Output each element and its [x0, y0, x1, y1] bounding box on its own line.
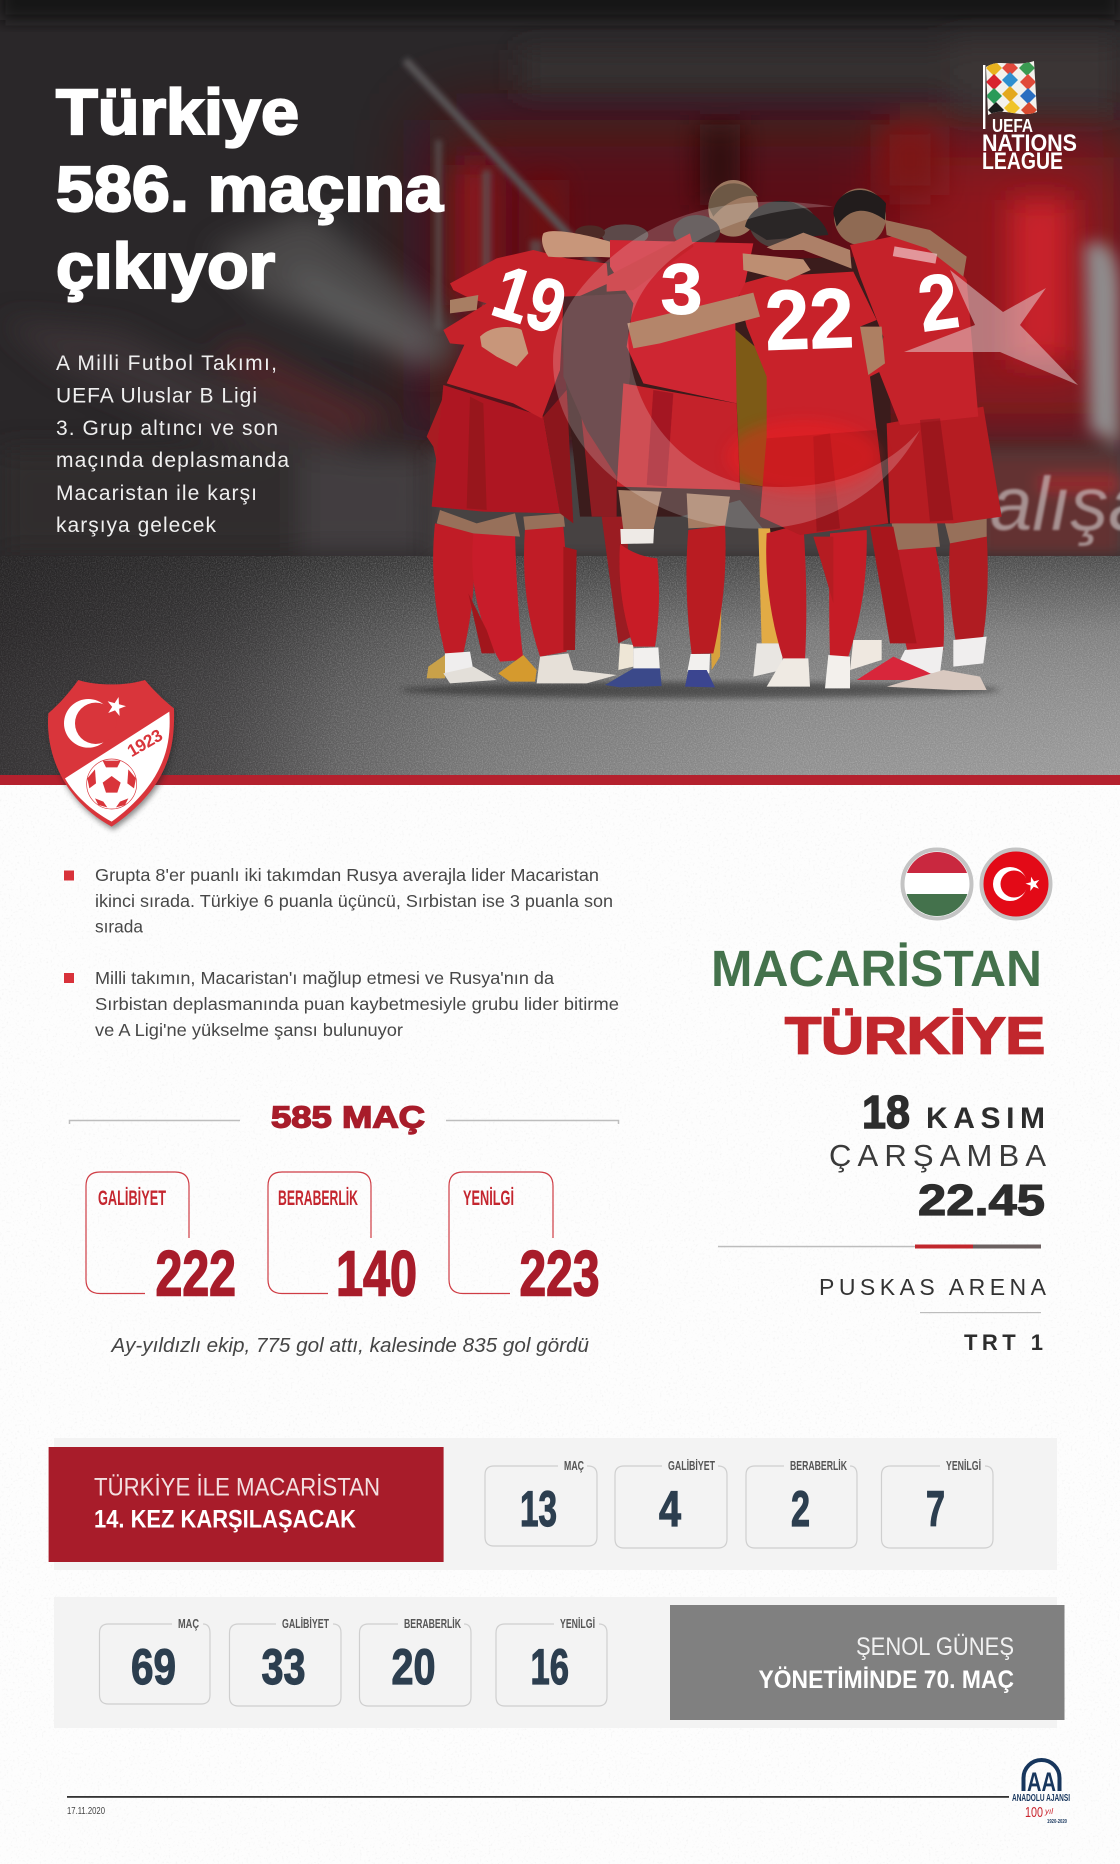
bullet two: ve A Ligi'ne yükselme şansı bulunuyor: [95, 1020, 403, 1040]
stat box: beraberlik 2: BERABERLİK: [790, 1458, 847, 1473]
logo: UEFA Nations League: UEFA: [992, 115, 1033, 136]
stat box: beraberlik 20: BERABERLİK: [404, 1616, 461, 1631]
logo: Anadolu Ajansı: AA: [1027, 1767, 1056, 1797]
bullet two: [64, 968, 619, 1040]
inner shadows: [553, 257, 893, 533]
date: 17.11.2020: [67, 1806, 105, 1817]
title: çıkıyor: [56, 230, 275, 302]
logo: Turkish Football Federation shield: 1923: [124, 725, 166, 761]
subtitle: maçında deplasmanda: [56, 449, 289, 472]
heads: [708, 180, 758, 237]
logo: UEFA Nations League: NATIONS: [982, 130, 1077, 157]
stat box: galibiyet 4: [615, 1458, 727, 1548]
stat box: beraberlik 2: [746, 1458, 857, 1548]
title: 586. maçına: [56, 153, 443, 225]
logo: Anadolu Ajansı: 1920-2020: [1047, 1819, 1067, 1825]
head to head banner: [49, 1447, 444, 1562]
subtitle: 3. Grup altıncı ve son: [56, 417, 278, 440]
bullet two: Milli takımın, Macaristan'ı mağlup etmesi ve Rusya'nın da: [95, 968, 554, 988]
match teams: [711, 940, 1045, 1066]
subtitle: [56, 352, 289, 537]
stat box: maç 13: 13: [520, 1481, 557, 1537]
pitch: [0, 556, 1120, 776]
match teams: MACARİSTAN: [711, 940, 1042, 997]
match date and time: ÇARŞAMBA: [829, 1138, 1046, 1173]
stat box: yenilgi 16: 16: [530, 1639, 569, 1695]
stat card: beraberlik: 140: [336, 1238, 417, 1310]
icon: Turkey flag: [982, 850, 1050, 918]
stat card: yenilgi: [449, 1172, 600, 1310]
stat card: beraberlik: BERABERLİK: [278, 1187, 358, 1210]
stat box: maç 13: MAÇ: [564, 1458, 584, 1473]
player 22: [766, 523, 806, 660]
title: Türkiye: [56, 76, 299, 148]
shirt numbers: 22: [763, 270, 855, 368]
centre player number 3: [618, 490, 662, 530]
logo: Turkish Football Federation shield: [48, 680, 176, 830]
far right player: [850, 220, 1002, 690]
stat box: yenilgi 7: 7: [926, 1481, 945, 1537]
logo: Anadolu Ajansı: yıl: [1044, 1807, 1053, 1816]
stat box: yenilgi 16: YENİLGİ: [560, 1616, 595, 1631]
shirt numbers: [483, 248, 964, 368]
panel: head to head: [49, 1438, 1057, 1570]
stat card: galibiyet: GALİBİYET: [98, 1187, 166, 1210]
bullet two: Sırbistan deplasmanında puan kaybetmesiyle grubu lider bitirme: [95, 994, 619, 1014]
stat box: galibiyet 4: GALİBİYET: [668, 1458, 715, 1473]
goals note: Ay-yıldızlı ekip, 775 gol attı, kalesinde 835 gol gördü: [110, 1335, 589, 1357]
icon: Hungary flag: [900, 850, 974, 918]
head to head banner: TÜRKİYE İLE MACARİSTAN: [94, 1473, 380, 1502]
arms: [542, 231, 610, 257]
logo: UEFA Nations League: LEAGUE: [982, 148, 1063, 175]
stat box: galibiyet 33: 33: [262, 1639, 306, 1695]
red sleeve arm: [607, 233, 693, 292]
stat box: yenilgi 7: YENİLGİ: [946, 1458, 981, 1473]
team huddle: [427, 180, 1002, 690]
match date and time: 22.45: [918, 1176, 1045, 1225]
moon and star overlay: [553, 202, 920, 529]
stat card: beraberlik: [268, 1172, 417, 1310]
match date and time: KASIM: [926, 1102, 1045, 1135]
footer rule: [67, 1796, 1009, 1798]
shirt numbers: 3: [661, 248, 703, 329]
stat box: beraberlik 2: 2: [791, 1481, 810, 1537]
shirt numbers: 2: [913, 256, 964, 348]
panel: Şenol Güneş record: [54, 1597, 1064, 1728]
stat box: galibiyet 33: [230, 1616, 341, 1706]
bullet one: Grupta 8'er puanlı iki takımdan Rusya averajla lider Macaristan: [95, 865, 599, 885]
stat box: maç 13: [485, 1458, 597, 1546]
stat box: yenilgi 7: [882, 1458, 993, 1548]
hero photo: [0, 0, 1120, 776]
stat box: maç 69: [100, 1616, 210, 1704]
shadow folds: [467, 390, 953, 532]
coach banner: YÖNETİMİNDE 70. MAÇ: [758, 1665, 1014, 1694]
coach banner: ŞENOL GÜNEŞ: [856, 1633, 1014, 1661]
coach banner: [670, 1605, 1064, 1720]
subtitle: karşıya gelecek: [56, 514, 216, 537]
bullet one: ikinci sırada. Türkiye 6 puanla üçüncü, Sırbistan ise 3 puanla son: [95, 891, 613, 911]
match date and time: [829, 1086, 1046, 1225]
stat box: galibiyet 33: GALİBİYET: [282, 1616, 329, 1631]
stat box: beraberlik 20: 20: [392, 1639, 436, 1695]
match teams: TÜRKİYE: [785, 1008, 1045, 1066]
goalkeeper: [736, 330, 767, 486]
stat card: yenilgi: 223: [520, 1238, 600, 1310]
heading: 585 maç: 585 MAÇ: [271, 1100, 425, 1134]
stat card: yenilgi: YENİLGİ: [463, 1187, 514, 1210]
title: [56, 76, 443, 302]
logo: UEFA Nations League: [983, 61, 1076, 169]
subtitle: Macaristan ile karşı: [56, 482, 257, 505]
subtitle: UEFA Uluslar B Ligi: [56, 384, 257, 408]
red divider band: [0, 775, 1120, 785]
stadium stairs: [0, 210, 460, 555]
stat box: yenilgi 16: [496, 1616, 607, 1706]
heading: 585 maç: [70, 1100, 618, 1134]
subtitle: A Milli Futbol Takımı,: [56, 352, 277, 375]
match divider: [718, 1244, 1041, 1248]
bullet one: [64, 865, 613, 936]
stat box: beraberlik 20: [360, 1616, 471, 1706]
stat box: galibiyet 4: 4: [659, 1481, 681, 1537]
head to head banner: 14. KEZ KARŞILAŞACAK: [94, 1506, 356, 1534]
back-facing dark player: [602, 517, 632, 643]
shirt numbers: 19: [483, 249, 576, 350]
stat card: galibiyet: [86, 1172, 236, 1310]
broadcaster: TRT 1: [964, 1330, 1043, 1355]
stat card: galibiyet: 222: [156, 1238, 236, 1310]
bullet one: sırada: [95, 916, 143, 936]
logo: Anadolu Ajansı: ANADOLU AJANSI: [1012, 1793, 1070, 1804]
lower right wall: [430, 242, 1120, 558]
venue: PUSKAS ARENA: [819, 1274, 1047, 1300]
logo: Anadolu Ajansı: [1012, 1760, 1070, 1825]
logo: Anadolu Ajansı: 100: [1025, 1804, 1043, 1821]
stat box: maç 69: 69: [131, 1639, 176, 1695]
player 19 (left): [427, 397, 447, 507]
bullet points: [64, 865, 619, 1040]
stat box: maç 69: MAÇ: [178, 1616, 199, 1631]
match date and time: 18: [862, 1086, 910, 1138]
